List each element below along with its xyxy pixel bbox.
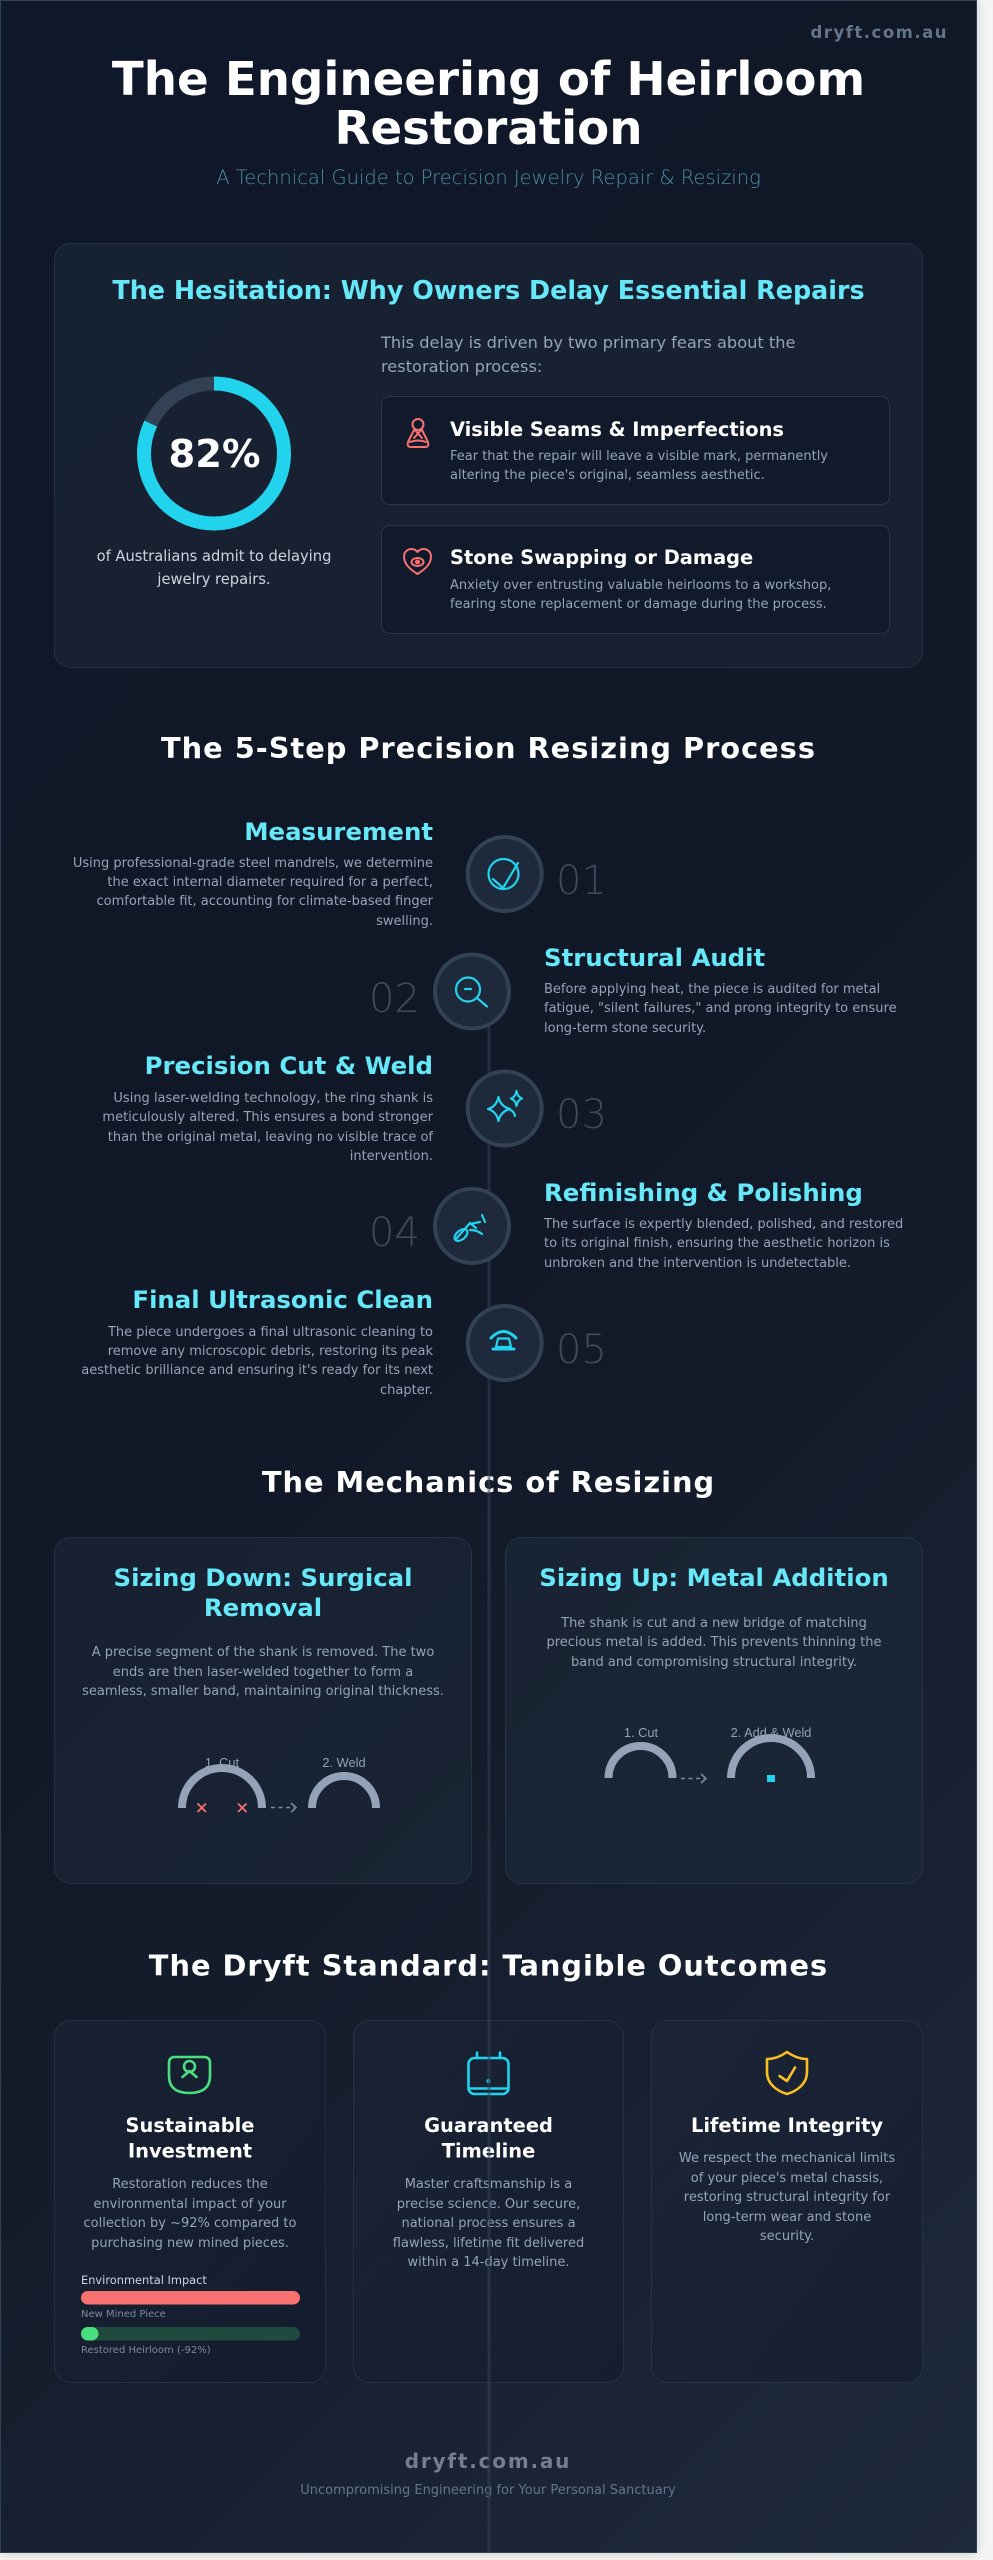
step 1: measurement: comfortable fit, accounting for climate-based finger <box>97 894 434 909</box>
card: visible seams: altering the piece's original, seamless aesthetic. <box>450 468 765 483</box>
heading: Sizing Up: Metal Addition <box>539 1563 889 1592</box>
description: restoring structural integrity for <box>684 2190 891 2205</box>
intro text: This delay is driven by two primary fears about the <box>380 333 795 352</box>
description: precise science. Our secure, <box>397 2197 580 2212</box>
card: stone swapping: fearing stone replacement or damage during the process. <box>450 597 827 612</box>
description <box>82 1645 444 1699</box>
intro text: restoration process: <box>381 357 542 376</box>
card: visible seams <box>382 396 890 504</box>
diagram: cut then add and weld: 1. Cut <box>624 1725 659 1740</box>
step 5: final ultrasonic clean: remove any microscopic debris, restoring its peak <box>108 1344 433 1359</box>
icon: polishing tool <box>452 1215 485 1243</box>
arrow <box>681 1774 706 1783</box>
heading: Lifetime Integrity <box>691 2114 883 2137</box>
bar chart: environmental impact: Restored Heirloom (-92%) <box>81 2345 211 2356</box>
heading: Timeline <box>442 2140 535 2162</box>
heading <box>114 1563 412 1622</box>
step 2: structural audit: Before applying heat, the piece is audited for metal <box>544 982 880 997</box>
description: within a 14-day timeline. <box>408 2255 569 2270</box>
card: lifetime integrity <box>652 2020 922 2382</box>
icon: magnifier <box>456 978 487 1006</box>
step 5: final ultrasonic clean: chapter. <box>380 1383 433 1398</box>
description: We respect the mechanical limits <box>679 2151 895 2166</box>
step 3: precision cut and weld: meticulously altered. This ensures a bond stronger <box>102 1110 434 1125</box>
donut chart: 82% <box>144 384 284 524</box>
heading: Removal <box>204 1593 322 1622</box>
diagram: cut then add and weld: 2. Add & Weld <box>731 1725 811 1740</box>
step 3: precision cut and weld: than the original metal, leaving no visible trace of <box>108 1130 433 1145</box>
donut caption: of Australians admit to delaying <box>97 548 331 565</box>
panel: sizing down <box>54 1538 472 1884</box>
description: Master craftsmanship is a <box>405 2177 572 2192</box>
step 1: measurement: Measurement <box>244 817 433 846</box>
heading: Sizing Down: Surgical <box>114 1563 412 1592</box>
donut caption: jewelry repairs. <box>156 571 271 588</box>
card: sustainable investment <box>54 2020 326 2382</box>
diagram: cut then add and weld <box>608 1725 811 1783</box>
icon: sparkles <box>488 1091 522 1121</box>
cut marks <box>198 1804 246 1812</box>
step 3: precision cut and weld: Using laser-welding technology, the ring shank is <box>113 1091 433 1106</box>
heading: Guaranteed <box>424 2114 553 2137</box>
card: visible seams: Visible Seams & Imperfections <box>450 418 784 441</box>
description: national process ensures a <box>401 2216 576 2231</box>
card: stone swapping <box>382 526 890 634</box>
description <box>546 1616 882 1670</box>
subtitle: A Technical Guide to Precision Jewelry Repair & Resizing <box>216 166 761 189</box>
icon: green badge <box>169 2057 210 2093</box>
step 1: measurement: 01 <box>556 858 607 904</box>
description: band and compromising structural integrity. <box>571 1655 857 1670</box>
description: precious metal is added. This prevents thinning the <box>546 1635 882 1650</box>
description: A precise segment of the shank is removed. The two <box>92 1645 434 1660</box>
step 5: final ultrasonic clean: aesthetic brilliance and ensuring it's ready for its next <box>81 1363 433 1378</box>
step 5: final ultrasonic clean: Final Ultrasonic Clean <box>132 1285 433 1314</box>
icon: shield check <box>767 2052 807 2094</box>
timeline connector <box>488 992 490 2553</box>
description <box>84 2177 297 2251</box>
step 2: structural audit <box>369 943 897 1036</box>
step 4: refinishing and polishing: unbroken and the intervention is undetectable. <box>544 1256 851 1271</box>
diagram: cut then weld <box>182 1755 376 1812</box>
step 4: refinishing and polishing: The surface is expertly blended, polished, and restored <box>543 1217 903 1232</box>
footer <box>300 2449 676 2498</box>
panel: sizing up <box>506 1538 922 1884</box>
intro text <box>380 333 795 376</box>
arrow <box>271 1803 296 1812</box>
panel: the hesitation <box>54 244 922 668</box>
step 5: final ultrasonic clean <box>81 1285 607 1398</box>
card: visible seams: Fear that the repair will leave a visible mark, permanently <box>450 449 828 464</box>
step 5: final ultrasonic clean: 05 <box>556 1327 607 1373</box>
description: long-term wear and stone <box>703 2210 871 2225</box>
section heading: standard: The Dryft Standard: Tangible Outcomes <box>149 1948 828 1982</box>
description: of your piece's metal chassis, <box>691 2171 883 2186</box>
section heading: mechanics: The Mechanics of Resizing <box>262 1465 715 1499</box>
step 1: measurement: Using professional-grade steel mandrels, we determine <box>73 856 433 871</box>
step 3: precision cut and weld: 03 <box>556 1092 607 1138</box>
description: The shank is cut and a new bridge of matching <box>560 1616 867 1631</box>
step 4: refinishing and polishing: 04 <box>369 1210 420 1256</box>
description: purchasing new mined pieces. <box>91 2236 289 2251</box>
card: stone swapping: Stone Swapping or Damage <box>450 546 753 569</box>
bar chart: environmental impact: New Mined Piece <box>81 2309 166 2320</box>
icon: calendar <box>468 2052 508 2094</box>
added metal bridge <box>767 1775 775 1782</box>
step 1: measurement <box>73 817 607 929</box>
description: flawless, lifetime fit delivered <box>393 2236 584 2251</box>
description: seamless, smaller band, maintaining original thickness. <box>82 1684 444 1699</box>
diagram: cut then weld: 1. Cut <box>205 1755 240 1770</box>
donut chart: 82%: 82% <box>169 432 260 477</box>
step 4: refinishing and polishing <box>369 1178 903 1271</box>
step 4: refinishing and polishing: Refinishing & Polishing <box>544 1178 863 1207</box>
description <box>679 2151 895 2244</box>
icon: seam figure <box>408 419 428 447</box>
diagram: cut then weld: 2. Weld <box>322 1755 366 1770</box>
title: The Engineering of Heirloom <box>112 53 865 107</box>
title <box>112 53 865 156</box>
step 2: structural audit: 02 <box>369 976 420 1022</box>
heading <box>126 2114 254 2162</box>
title: Restoration <box>335 102 642 156</box>
bar chart: environmental impact: Environmental Impact <box>81 2273 207 2287</box>
section heading: process: The 5-Step Precision Resizing Process <box>161 731 816 765</box>
description: Restoration reduces the <box>112 2177 268 2192</box>
panel heading: The Hesitation: Why Owners Delay Essential Repairs <box>112 275 865 305</box>
donut caption <box>97 548 331 588</box>
step 5: final ultrasonic clean: The piece undergoes a final ultrasonic cleaning to <box>107 1325 433 1340</box>
heading: Investment <box>128 2140 252 2162</box>
description: environmental impact of your <box>93 2197 287 2212</box>
step 3: precision cut and weld: Precision Cut & Weld <box>145 1051 433 1080</box>
description <box>393 2177 584 2270</box>
heading <box>424 2114 553 2162</box>
description: collection by ~92% compared to <box>84 2216 297 2231</box>
description: security. <box>760 2229 814 2244</box>
watermark: dryft.com.au <box>810 23 948 42</box>
step 3: precision cut and weld: intervention. <box>350 1149 433 1164</box>
footer: Uncompromising Engineering for Your Personal Sanctuary <box>300 2483 676 2498</box>
step 1: measurement: swelling. <box>376 914 433 929</box>
step 2: structural audit: Structural Audit <box>544 943 765 972</box>
step 4: refinishing and polishing: to its original finish, ensuring the aesthetic horizon is <box>544 1236 890 1251</box>
step 1: measurement: the exact internal diameter required for a perfect, <box>107 875 433 890</box>
icon: check circle <box>488 859 518 889</box>
card: guaranteed timeline <box>354 2020 624 2382</box>
bar chart: environmental impact <box>81 2273 300 2356</box>
description: ends are then laser-welded together to form a <box>113 1665 413 1680</box>
step 3: precision cut and weld <box>102 1051 607 1164</box>
heading: Sustainable <box>126 2114 254 2137</box>
icon: heart with eye <box>404 549 431 574</box>
card: stone swapping: Anxiety over entrusting valuable heirlooms to a workshop, <box>450 578 831 593</box>
step 2: structural audit: long-term stone security. <box>544 1021 706 1036</box>
step 2: structural audit: fatigue, "silent failures," and prong integrity to ensure <box>544 1001 897 1016</box>
icon: ultrasonic cleaner <box>491 1332 516 1349</box>
footer: dryft.com.au <box>405 2449 571 2473</box>
